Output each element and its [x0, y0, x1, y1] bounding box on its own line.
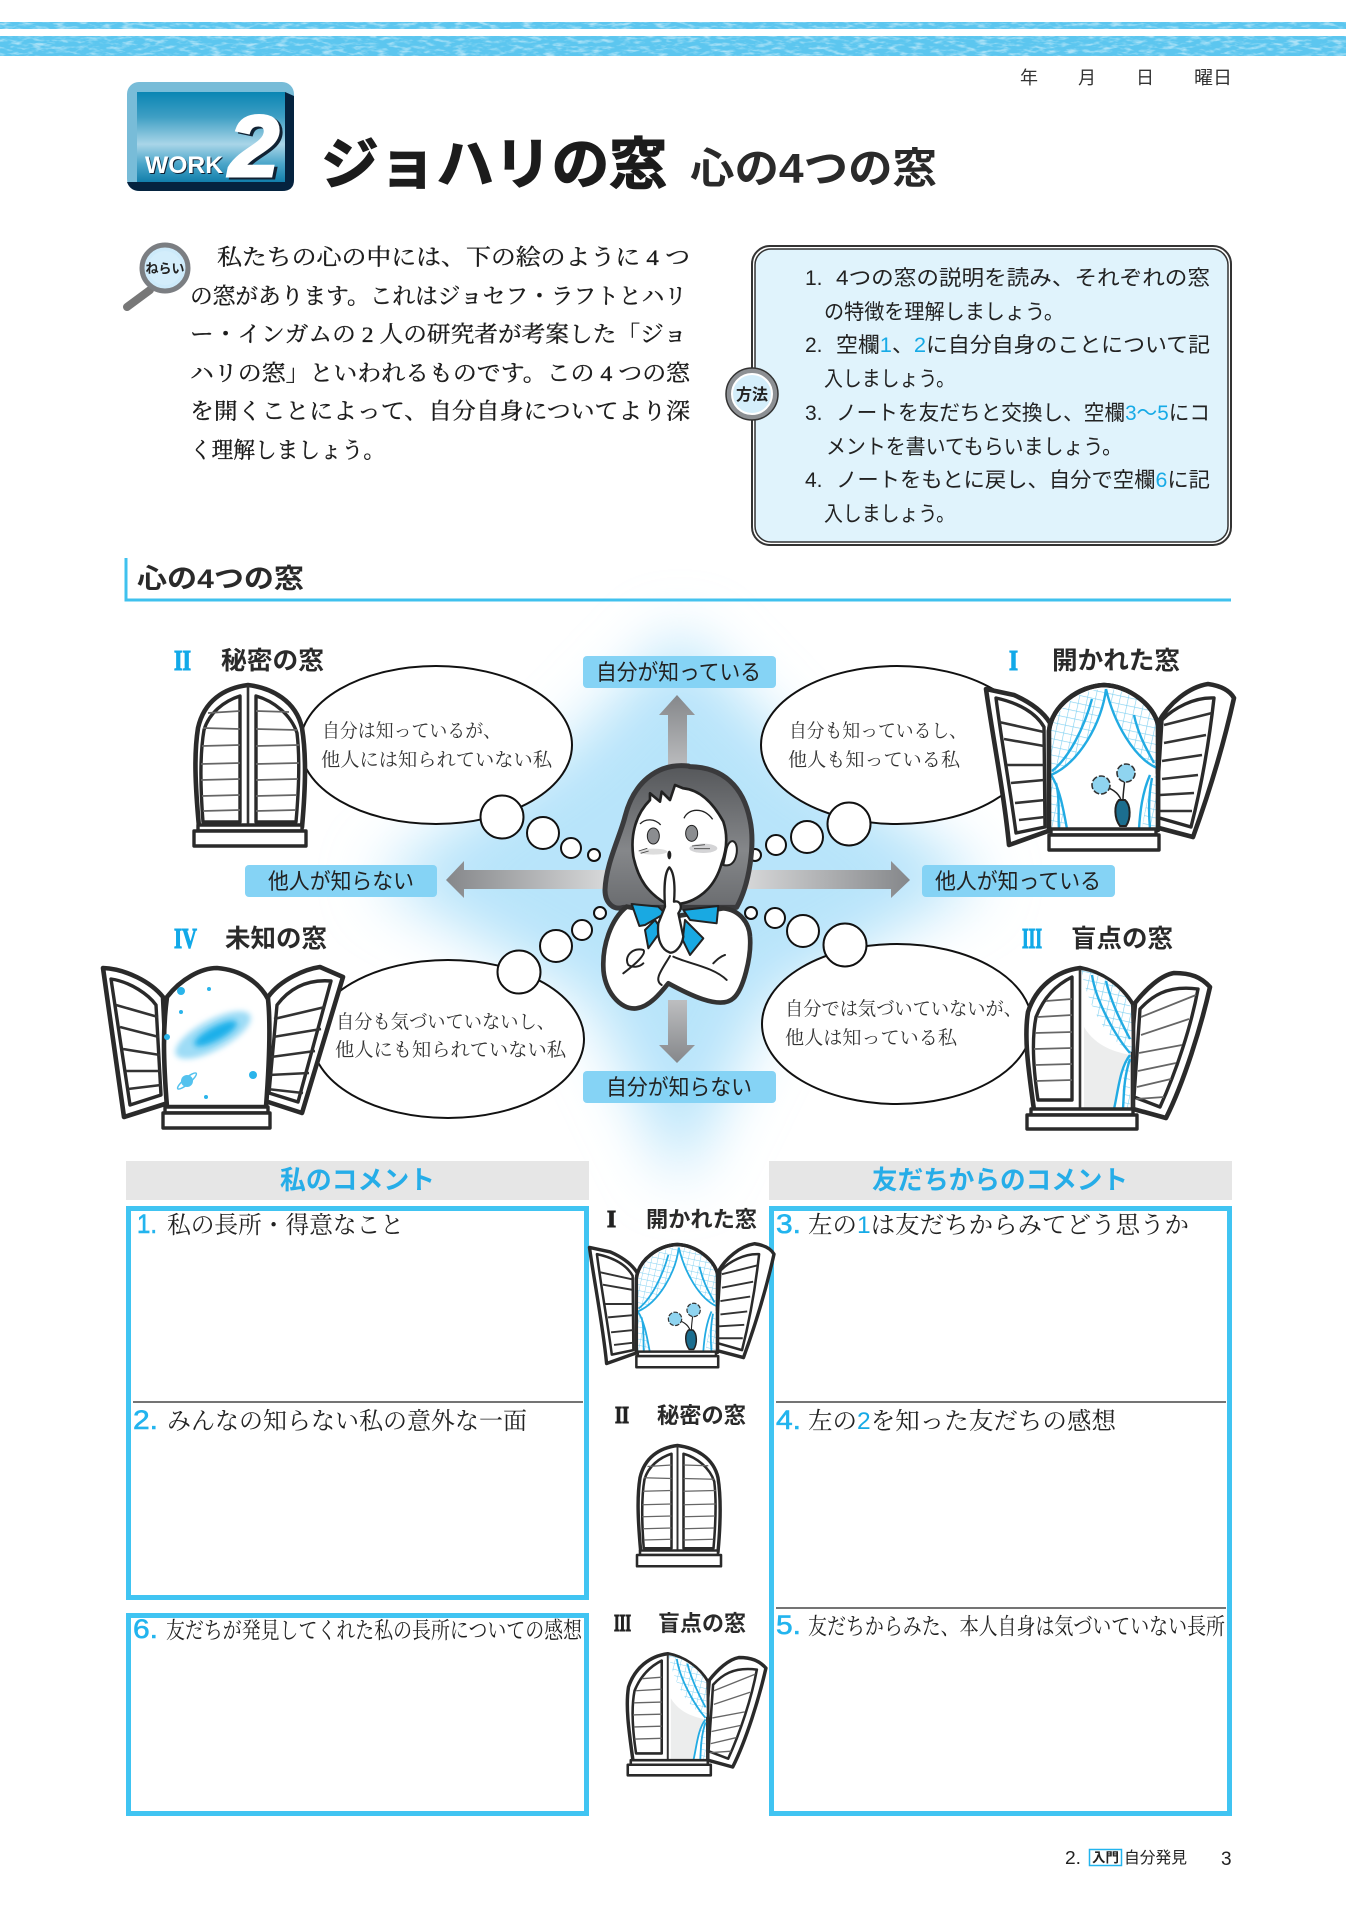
- center key: I open window: I: [607, 1207, 616, 1233]
- title: ジョハリの窓: [321, 133, 667, 196]
- field 5 label: 友だちからみた、本人自身は気づいていない長所: [808, 1614, 1225, 1639]
- panel: IV unknown window: [103, 907, 606, 1128]
- field 1 label: 1.: [137, 1209, 157, 1239]
- date line: 月: [1078, 68, 1096, 88]
- thought bubble I: 自分も知っているし、: [789, 720, 967, 742]
- badge: WORK 2: 2: [230, 101, 282, 197]
- icon: method badge: [726, 368, 778, 420]
- thought bubble III: [745, 907, 1032, 1104]
- icon: magnifier ねらい: [127, 245, 188, 307]
- panel: I open window: [749, 646, 1234, 861]
- thought bubble II: [300, 666, 600, 861]
- panel: II secret window: [174, 646, 600, 861]
- field 5 label: 5.: [776, 1610, 801, 1640]
- arrow: down: [659, 1000, 695, 1063]
- method step text: 入しましょう。: [824, 368, 955, 391]
- intro text: ー・インガムの 2 人の研究者が考案した「ジョ: [190, 322, 687, 347]
- panel: method steps: [752, 246, 1231, 545]
- heading: II: 秘密の窓: [221, 647, 324, 675]
- header: friends' comments: 友だちからのコメント: [872, 1165, 1128, 1195]
- date line: [1020, 68, 1232, 88]
- method step text: ノートをもとに戻し、自分で空欄6に記: [836, 469, 1210, 492]
- label: others know: 他人が知っている: [935, 869, 1101, 894]
- method step text: メントを書いてもらいましょう。: [826, 436, 1122, 459]
- label: others do not know: [245, 865, 437, 897]
- label: knows self: 自分が知っている: [596, 660, 761, 685]
- panel: comment fields 3, 4, 5: [772, 1208, 1230, 1814]
- intro text: ハリの窓」といわれるものです。この 4 つの窓: [190, 361, 691, 386]
- intro text: の窓があります。これはジョセフ・ラフトとハリ: [190, 284, 687, 309]
- label: others do not know: 他人が知らない: [268, 869, 414, 894]
- intro text: く理解しましょう。: [190, 438, 385, 463]
- heading: I: 開かれた窓: [1052, 647, 1180, 675]
- center key: III blind window: [614, 1611, 766, 1775]
- date line: 年: [1020, 68, 1038, 88]
- badge: WORK 2: [127, 82, 294, 197]
- badge: WORK 2: WORK: [146, 153, 225, 180]
- field 4 label: 4.: [776, 1405, 801, 1435]
- field 3 label: 3.: [776, 1209, 801, 1239]
- method step text: 空欄1、2に自分自身のことについて記: [836, 334, 1210, 357]
- thought bubble I: [749, 666, 1033, 861]
- arrow: up: [659, 695, 695, 770]
- field 5 label: [776, 1610, 1225, 1640]
- header: friends' comments: [769, 1161, 1232, 1200]
- heading: IV: 未知の窓: [225, 925, 327, 953]
- subtitle: 心の4つの窓: [690, 145, 937, 192]
- panel: comment field 6: [128, 1614, 586, 1814]
- center key: I open window: [589, 1207, 774, 1367]
- heading: III: III: [1022, 924, 1042, 955]
- header: my comments: 私のコメント: [280, 1165, 435, 1195]
- footer: page label: 自分発見: [1124, 1849, 1187, 1867]
- thought bubble III: 自分では気づいていないが、: [785, 998, 1022, 1020]
- footer: page label: 3: [1221, 1849, 1232, 1870]
- intro text: 私たちの心の中には、下の絵のように 4 つ: [217, 245, 690, 270]
- thought bubble IV: 自分も気づいていないし、: [336, 1011, 555, 1033]
- heading: I: [1009, 646, 1180, 677]
- method step text: ノートを友だちと交換し、空欄3〜5にコ: [836, 402, 1210, 425]
- method step text: 1.: [805, 267, 823, 290]
- method step text: 4.: [805, 469, 823, 492]
- icon: method badge: 方法: [736, 385, 768, 404]
- label: self does not know: [583, 1071, 776, 1103]
- intro text: を開くことによって、自分自身についてより深: [190, 399, 690, 424]
- diagram glow background: [375, 630, 985, 1185]
- field 2 label: みんなの知らない私の意外な一面: [167, 1408, 527, 1435]
- header: my comments: [126, 1161, 589, 1200]
- intro text: [190, 245, 691, 463]
- center key: II secret window: [615, 1403, 746, 1566]
- icon: open window with curtains: [986, 684, 1234, 850]
- thought bubble IV: [312, 907, 606, 1118]
- section heading: [126, 558, 1231, 600]
- top decorative bands: [0, 22, 1346, 56]
- heading: II: II: [174, 646, 191, 677]
- method step text: の特徴を理解しましょう。: [824, 301, 1064, 324]
- method step text: 4つの窓の説明を読み、それぞれの窓: [836, 267, 1210, 290]
- icon: half-open window: [1026, 968, 1210, 1129]
- center key: II secret window: 秘密の窓: [657, 1403, 746, 1428]
- badge: WORK 2: WORK: [145, 152, 224, 179]
- icon: magnifier ねらい: ねらい: [145, 261, 185, 276]
- field 1 label: 私の長所・得意なこと: [167, 1212, 404, 1239]
- method step text: 2.: [805, 334, 823, 357]
- panel: comment fields 1 and 2: [128, 1208, 586, 1598]
- icon: window with galaxy: [103, 967, 343, 1128]
- center key: III blind window: 盲点の窓: [658, 1611, 746, 1636]
- thought bubble III: 他人は知っている私: [785, 1027, 958, 1049]
- center key: III blind window: III: [614, 1611, 631, 1637]
- method step text: 3.: [805, 402, 823, 425]
- illustration: girl with finger on lips: [603, 766, 752, 1008]
- arrow: left: [446, 861, 610, 898]
- footer: page label: 入門: [1092, 1850, 1119, 1865]
- heading: III: 盲点の窓: [1071, 925, 1173, 953]
- heading: III: [1022, 924, 1173, 955]
- date line: 曜日: [1194, 68, 1232, 88]
- date line: 日: [1136, 68, 1154, 88]
- field 2 label: 2.: [133, 1405, 158, 1435]
- heading: II: [174, 646, 324, 677]
- heading: IV: IV: [174, 924, 197, 955]
- center key: I open window: 開かれた窓: [646, 1207, 757, 1232]
- heading: IV: [174, 924, 327, 955]
- section heading: 心の4つの窓: [137, 564, 304, 594]
- panel: comment field 6: 6.: [133, 1614, 158, 1644]
- label: self does not know: 自分が知らない: [606, 1075, 752, 1100]
- method step text: [805, 267, 1210, 526]
- panel: III blind window: [745, 907, 1210, 1129]
- center key: II secret window: II: [615, 1403, 629, 1429]
- badge: WORK 2: 2: [227, 99, 279, 195]
- thought bubble I: 他人も知っている私: [788, 749, 961, 771]
- thought bubble IV: 他人にも知られていない私: [335, 1039, 567, 1061]
- footer: page label: [1065, 1848, 1232, 1870]
- thought bubble II: 自分は知っているが、: [322, 720, 501, 742]
- field 3 label: 左の1は友だちからみてどう思うか: [808, 1212, 1189, 1239]
- icon: closed window: [194, 685, 306, 846]
- panel: comment field 6: 友だちが発見してくれた私の長所についての感想: [166, 1618, 583, 1643]
- field 4 label: 左の2を知った友だちの感想: [808, 1408, 1117, 1435]
- method step text: 入しましょう。: [824, 503, 955, 526]
- thought bubble II: 他人には知られていない私: [321, 749, 553, 771]
- arrow: right: [740, 861, 910, 898]
- heading: I: I: [1009, 646, 1018, 677]
- footer: page label: 2.: [1065, 1848, 1081, 1868]
